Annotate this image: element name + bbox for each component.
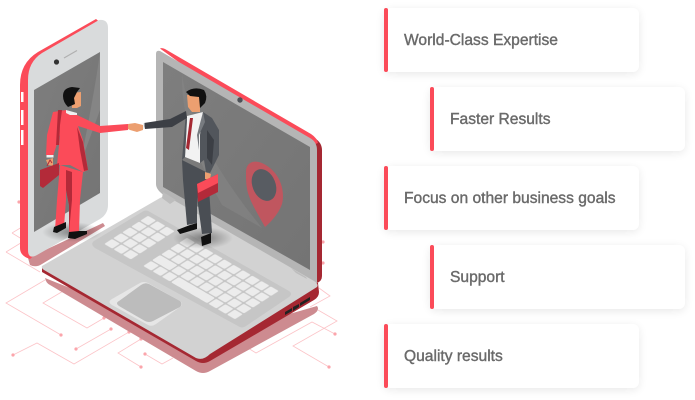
hinge feet — [162, 192, 307, 279]
head — [71, 92, 81, 108]
hair — [186, 88, 206, 108]
card: Quality results: Quality results — [404, 348, 503, 365]
laptop screen — [163, 62, 310, 270]
hand — [46, 158, 53, 166]
jacket — [200, 112, 219, 173]
phone body — [28, 20, 108, 257]
circuit lines — [6, 200, 337, 369]
phone shadow — [28, 223, 105, 266]
trousers — [182, 160, 212, 234]
head — [187, 94, 200, 112]
laptop shadow — [45, 278, 318, 373]
phone camera and speaker — [54, 50, 77, 65]
card: Faster Results: Faster Results — [450, 111, 551, 128]
laptop lid red edge — [300, 130, 322, 283]
laptop base edge — [42, 268, 319, 363]
businessman in grey suit — [143, 88, 219, 246]
collar and cuff — [46, 110, 77, 158]
card: Support: Support — [450, 269, 505, 286]
ports — [285, 297, 310, 315]
keyboard well — [92, 210, 291, 328]
card: Faster Results — [430, 87, 685, 151]
card: Focus on other business goals: Focus on other business goals — [404, 190, 616, 207]
phone red side — [20, 19, 102, 259]
laptop base — [42, 192, 319, 363]
touchpad — [110, 282, 182, 326]
card: Support — [430, 245, 685, 309]
phone — [20, 19, 108, 259]
card: World-Class Expertise: World-Class Expertise — [404, 32, 558, 49]
extended arm — [144, 111, 187, 129]
red briefcase — [197, 174, 218, 202]
card: Focus on other business goals — [384, 166, 639, 230]
laptop lid bezel — [156, 51, 317, 284]
main keys — [142, 237, 280, 320]
shoes — [177, 223, 211, 246]
shadows under figures — [42, 222, 102, 242]
map pin — [246, 162, 283, 227]
hair — [63, 87, 80, 107]
laptop lid — [156, 48, 322, 284]
phone screen — [34, 52, 100, 232]
shirt — [185, 112, 203, 163]
trousers — [55, 165, 83, 233]
businessman in red suit — [40, 87, 128, 239]
left keys — [103, 215, 176, 260]
laptop base top — [42, 196, 318, 359]
hand — [205, 172, 211, 180]
card: World-Class Expertise — [384, 8, 639, 72]
shoes — [53, 222, 87, 239]
phone side buttons — [21, 92, 24, 145]
red briefcase — [40, 160, 59, 188]
laptop camera — [237, 97, 243, 103]
jacket — [46, 110, 128, 172]
handshake — [128, 123, 143, 132]
illustration: handshake between phone and laptop — [6, 19, 338, 373]
tie — [186, 118, 193, 150]
card: Quality results — [384, 324, 639, 388]
